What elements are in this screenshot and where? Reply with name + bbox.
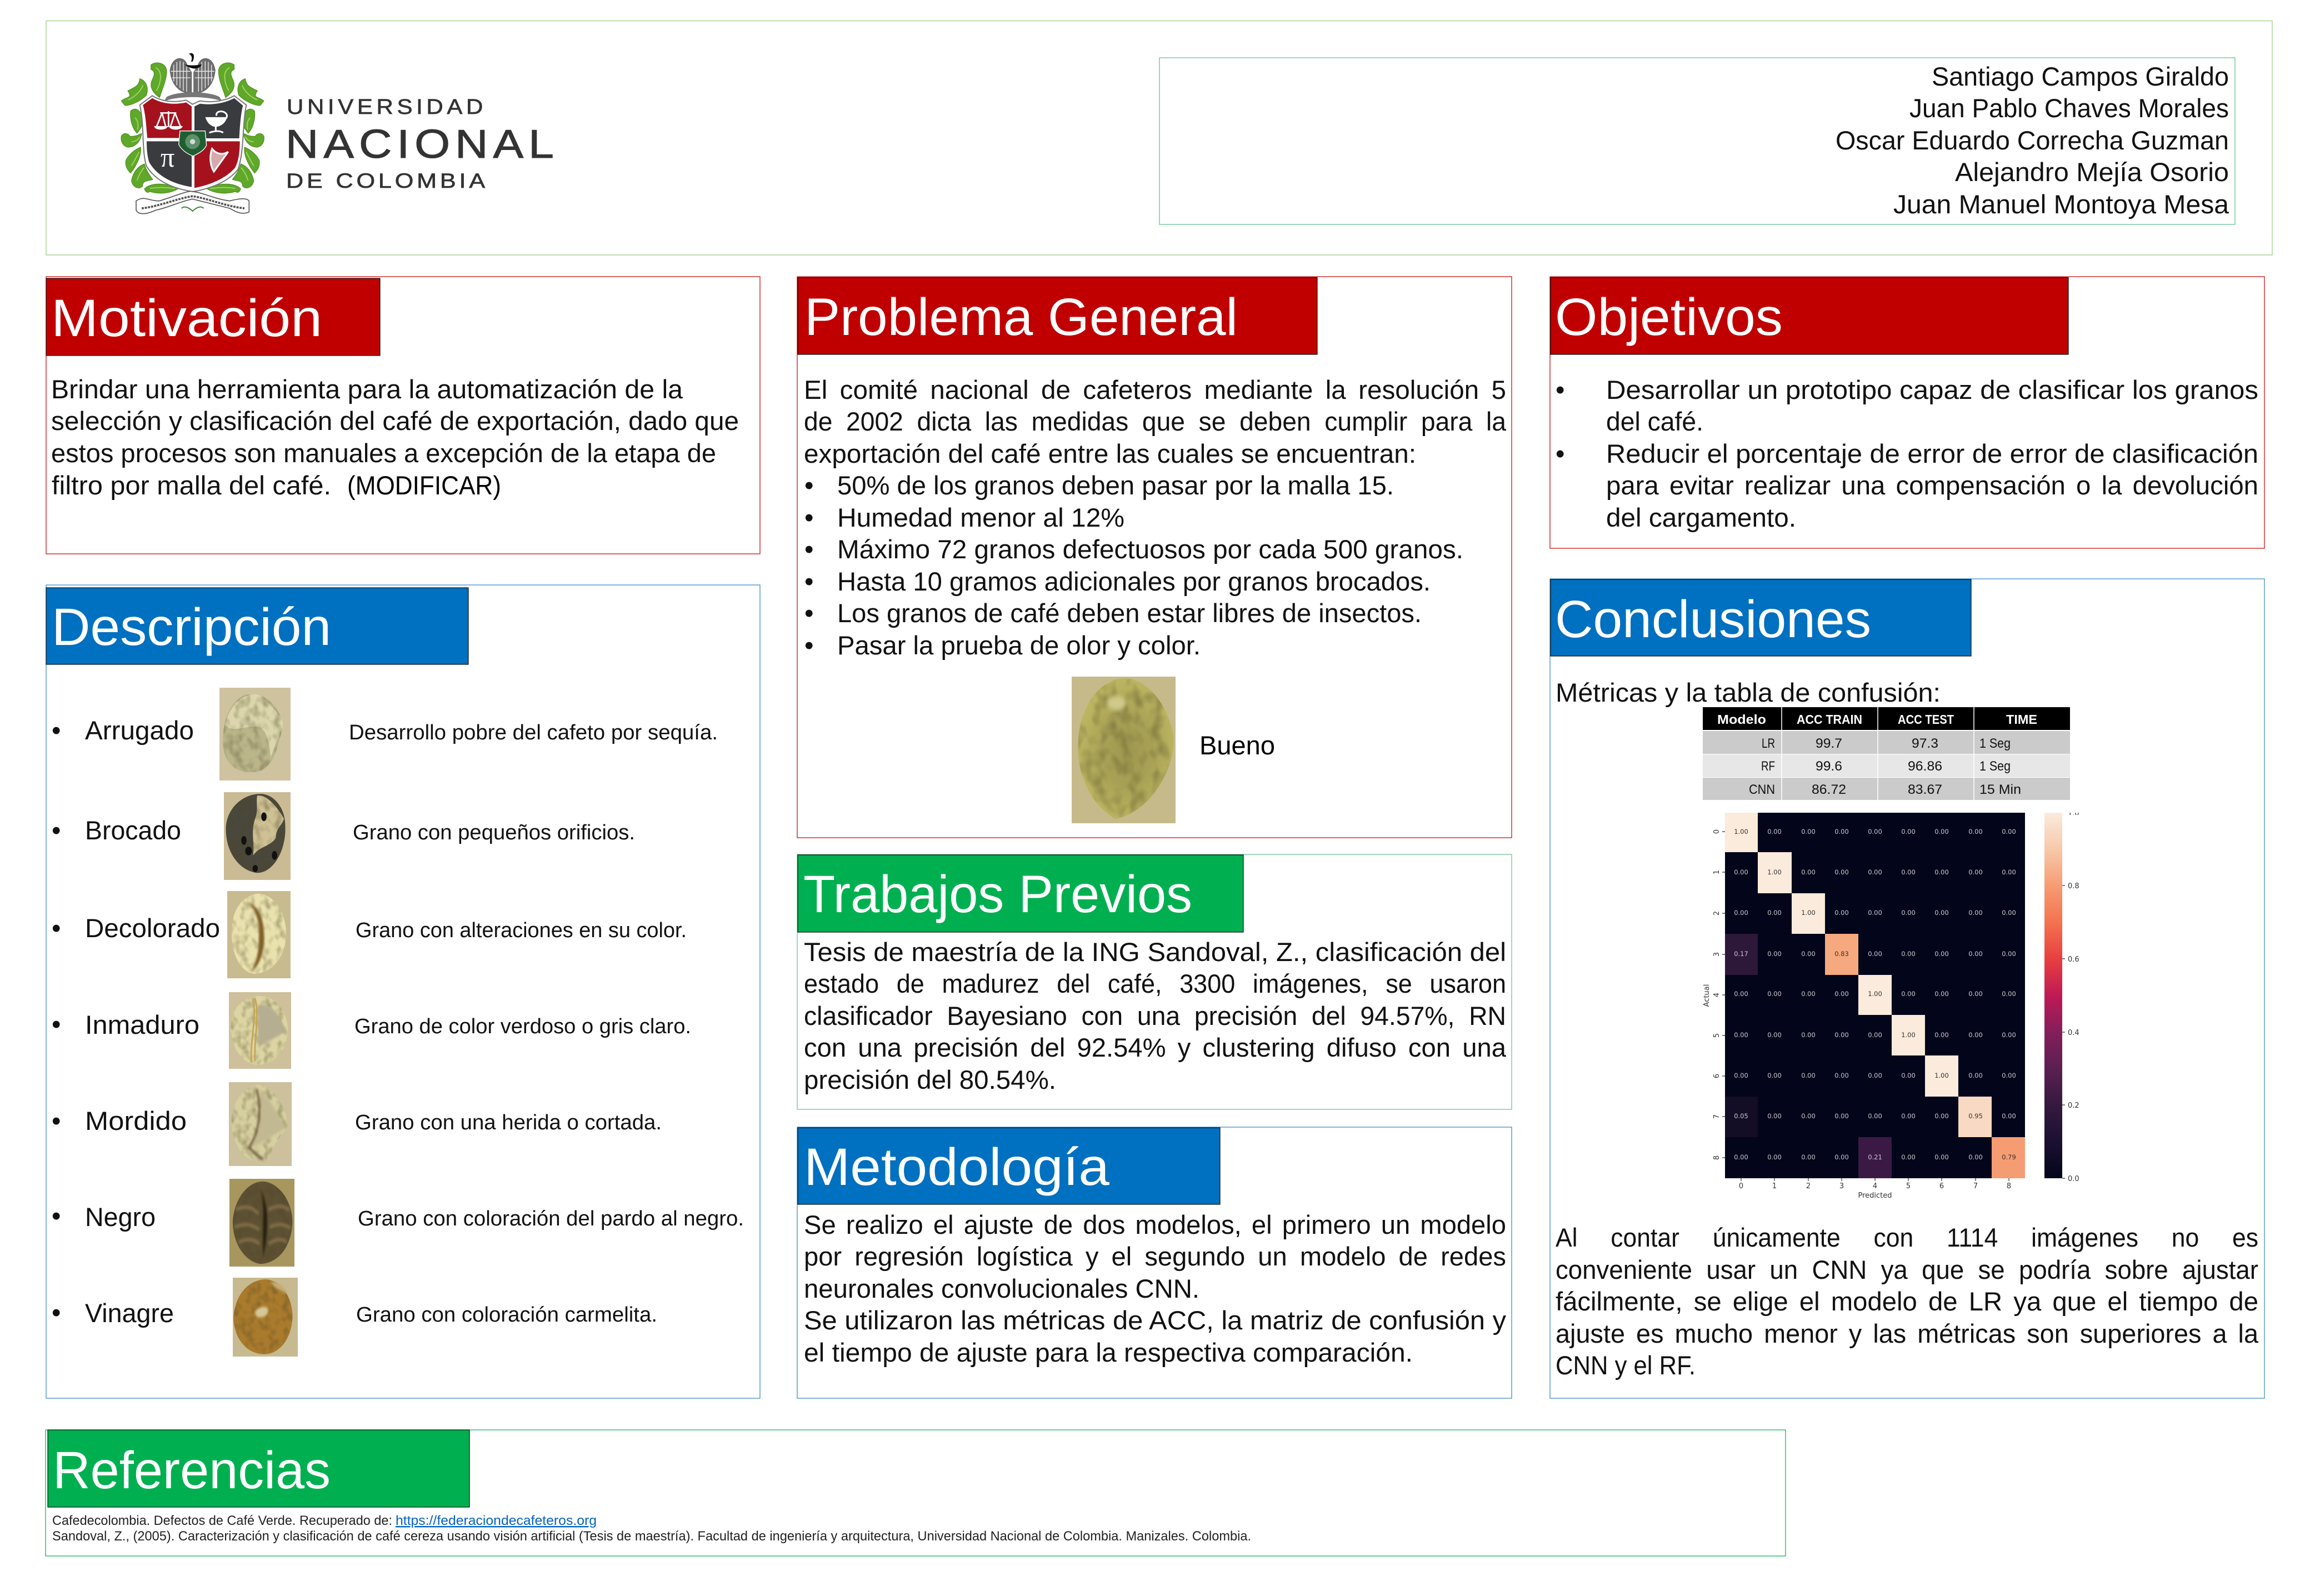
icon: scales — [155, 111, 182, 129]
item: Arrugado: • — [52, 716, 61, 745]
heatmap cells: 0.00 — [1968, 1031, 1983, 1039]
list: export requirements: 50% de los granos deben pasar por la malla 15. — [837, 471, 1394, 500]
heatmap cells: 0.00 — [2002, 1112, 2016, 1120]
heatmap cells: 0.00 — [1801, 950, 1816, 958]
text: conclusions body: fácilmente, se elige el modelo de LR ya que el tiempo de — [1556, 1287, 2258, 1316]
heatmap cells: 0.00 — [1934, 1112, 1949, 1120]
heatmap cells: 0.00 — [1934, 950, 1949, 958]
heatmap cells: 0.00 — [1834, 1112, 1849, 1120]
panel: Motivación — [46, 277, 760, 554]
heatmap cells: 0.00 — [2002, 1031, 2016, 1039]
colour bar: 0.0 — [2068, 1175, 2079, 1183]
heatmap cells: 0.00 — [1767, 1031, 1782, 1039]
heatmap cells: 0.00 — [1968, 1072, 1983, 1079]
list: export requirements — [804, 471, 1463, 660]
heatmap cells: 0.00 — [1934, 828, 1949, 835]
heatmap cells: 0.83 — [1834, 950, 1849, 958]
heatmap cells: 0.95 — [1968, 1112, 1983, 1120]
axis ticks and labels — [1703, 829, 2065, 1200]
heatmap cells: 1.00 — [1767, 868, 1782, 876]
axis ticks and labels: 7 — [1973, 1182, 1978, 1190]
text: references: https://federaciondecafeteros.org — [396, 1513, 597, 1528]
axis ticks and labels: 6 — [1939, 1182, 1944, 1190]
heatmap cells: 0.00 — [1801, 828, 1816, 835]
axis ticks and labels: 3 — [1713, 952, 1721, 957]
item: Brocado — [52, 792, 635, 880]
axis ticks and labels: 1 — [1713, 870, 1721, 874]
text: Trabajos Previos body: clasificador Bayesiano con una precisión del 94.57%, RN — [804, 1001, 1506, 1030]
item: Negro — [52, 1179, 744, 1267]
item: Brocado: Grano con pequeños orificios. — [353, 821, 635, 844]
heatmap cells: 0.00 — [1767, 1153, 1782, 1161]
heatmap cells: 0.00 — [1901, 950, 1916, 958]
axis ticks and labels: 5 — [1906, 1182, 1911, 1190]
axis ticks and labels: 4 — [1713, 993, 1721, 997]
image: bean Arrugado — [219, 688, 291, 781]
list: export requirements: • — [804, 534, 813, 564]
text: conclusions body: Al contar únicamente con 1114 imágenes no es — [1556, 1223, 2258, 1252]
heading: Referencias — [48, 1430, 469, 1507]
text: Metodología body: neuronales convolucionales CNN. — [804, 1274, 1199, 1303]
heatmap cells: 1.00 — [1901, 1031, 1916, 1039]
text: references: Sandoval, Z., (2005). Caracterización y clasificación de café cereza usando visión artificial (Tesis de maestría). Facultad de ingeniería y arquitectura, Universidad Nacional de Colombia. Manizales. Colombia. — [52, 1529, 1251, 1544]
item: Mordido — [52, 1082, 662, 1166]
text: Trabajos Previos body: Tesis de maestría de la ING Sandoval, Z., clasificación del — [804, 937, 1506, 967]
heatmap cells: 0.00 — [1801, 1072, 1816, 1079]
axis ticks and labels: 2 — [1806, 1182, 1811, 1190]
item: Inmaduro: Inmaduro — [85, 1010, 199, 1039]
text: references: Cafedecolombia. Defectos de Café Verde. Recuperado de: — [52, 1513, 392, 1528]
image: bean Negro — [229, 1179, 294, 1267]
scroll ribbon — [136, 191, 249, 214]
item: Negro: Negro — [85, 1202, 156, 1232]
table: model metrics: RF — [1761, 759, 1775, 774]
item: Arrugado: Arrugado — [85, 716, 194, 745]
text: Problema General body: exportación del café entre las cuales se encuentran: — [804, 439, 1416, 468]
image: bean Brocado — [224, 792, 291, 880]
heading: Metodología: Metodología — [804, 1138, 1109, 1197]
heatmap cells: 1.00 — [1734, 828, 1748, 835]
heatmap cells: 1.00 — [1801, 909, 1816, 917]
item: Vinagre: Grano con coloración carmelita. — [356, 1303, 657, 1327]
heading: Motivación: Motivación — [51, 289, 322, 348]
axis ticks and labels: 5 — [1713, 1033, 1721, 1038]
panel: Referencias — [46, 1430, 1786, 1556]
item: Inmaduro — [52, 992, 691, 1069]
table: model metrics: 1 Seg — [1979, 759, 2011, 774]
item: Vinagre: Vinagre — [85, 1298, 174, 1328]
heading: Problema General: Problema General — [804, 288, 1238, 347]
panel: Problema General — [797, 277, 1512, 838]
item: Mordido: Mordido — [85, 1106, 187, 1135]
heatmap cells: 0.00 — [1801, 990, 1816, 998]
heatmap cells: 0.00 — [1834, 1153, 1849, 1161]
table: model metrics: 1 Seg — [1979, 736, 2011, 751]
heatmap cells: 0.00 — [1901, 828, 1916, 835]
logo wordmark — [286, 96, 559, 192]
text: conclusions body — [1556, 1223, 2259, 1380]
heatmap cells: 0.00 — [1834, 868, 1849, 876]
heatmap cells: 0.00 — [1767, 1112, 1782, 1120]
heatmap cells: 0.00 — [1868, 1112, 1882, 1120]
heading: Problema General — [798, 278, 1317, 354]
item: Inmaduro: Grano de color verdoso o gris claro. — [354, 1015, 691, 1038]
item: Brocado: • — [52, 815, 61, 845]
list: objectives: • — [1556, 375, 1564, 404]
heatmap cells: 0.00 — [1734, 1153, 1748, 1161]
text: conclusions body: CNN y el RF. — [1556, 1350, 1696, 1380]
text: metrics intro: Métricas y la tabla de confusión: — [1556, 678, 1941, 707]
heatmap cells: 0.00 — [1734, 868, 1748, 876]
list: export requirements: Hasta 10 gramos adicionales por granos brocados. — [837, 567, 1431, 596]
axis ticks and labels: 8 — [1713, 1155, 1721, 1160]
list: export requirements: Los granos de café deben estar libres de insectos. — [837, 598, 1422, 628]
text: Motivación body: filtro por malla del café. — [52, 471, 331, 500]
heatmap cells: 0.05 — [1734, 1112, 1748, 1120]
item: Inmaduro: • — [52, 1009, 61, 1039]
heatmap cells: 0.17 — [1734, 950, 1748, 958]
text: Problema General body: El comité nacional de cafeteros mediante la resolución 5 — [804, 375, 1506, 404]
colour bar: 0.6 — [2068, 955, 2079, 964]
authors box: Santiago Campos Giraldo — [1932, 62, 2229, 91]
heading: Conclusiones — [1551, 579, 1971, 656]
panel: Metodología — [797, 1127, 1512, 1398]
icon: harp — [211, 149, 228, 172]
item: Decolorado: Grano con alteraciones en su color. — [356, 919, 687, 942]
item: Brocado: Brocado — [85, 815, 181, 845]
heatmap cells: 0.00 — [1934, 1153, 1949, 1161]
heatmap cells: 0.00 — [2002, 990, 2016, 998]
heatmap cells: 0.00 — [1934, 868, 1949, 876]
heatmap cells: 0.79 — [2002, 1153, 2016, 1161]
authors box: Juan Pablo Chaves Morales — [1909, 93, 2229, 123]
panel: Conclusiones — [1550, 579, 2264, 1398]
heatmap cells: 0.00 — [1868, 950, 1882, 958]
heatmap cells: 0.00 — [1934, 1031, 1949, 1039]
list: objectives: para evitar realizar una compensación o la devolución — [1606, 471, 2258, 500]
image: bean Decolorado — [227, 891, 291, 978]
heatmap cells: 0.00 — [1934, 990, 1949, 998]
axis ticks and labels: 1 — [1772, 1182, 1777, 1190]
text: Metodología body: el tiempo de ajuste para la respectiva comparación. — [804, 1338, 1413, 1367]
list: export requirements: • — [804, 471, 813, 500]
heatmap cells: 0.00 — [1901, 990, 1916, 998]
item: Mordido: Grano con una herida o cortada. — [355, 1111, 662, 1134]
authors box — [1159, 58, 2235, 224]
axis ticks and labels: 8 — [2007, 1182, 2011, 1190]
heatmap cells: 0.00 — [1868, 868, 1882, 876]
heatmap cells: 0.00 — [1801, 1153, 1816, 1161]
panel: header — [46, 21, 2272, 255]
authors box: Alejandro Mejía Osorio — [1955, 157, 2229, 187]
heatmap cells: 1.00 — [1934, 1072, 1949, 1079]
heatmap cells: 0.00 — [1901, 868, 1916, 876]
heatmap cells: 0.00 — [1801, 1112, 1816, 1120]
heading: Descripción — [46, 588, 468, 664]
text: Motivación body: estos procesos son manuales a excepción de la etapa de — [51, 438, 716, 468]
table: model metrics: ACC TRAIN — [1797, 712, 1862, 727]
list: export requirements: • — [804, 503, 813, 532]
icon: pi symbol: π — [161, 142, 174, 173]
item: Arrugado — [52, 688, 718, 781]
logo wordmark: UNIVERSIDAD — [287, 96, 487, 119]
heatmap cells: 0.00 — [2002, 950, 2016, 958]
logo wordmark: DE COLOMBIA — [286, 169, 488, 192]
panel: Trabajos Previos — [797, 854, 1512, 1109]
table: model metrics: TIME — [2006, 712, 2037, 727]
heading: Descripción: Descripción — [52, 598, 331, 657]
item: Decolorado: • — [52, 913, 61, 943]
item: Negro: Grano con coloración del pardo al negro. — [358, 1207, 744, 1230]
heatmap cells: 0.00 — [1901, 1112, 1916, 1120]
table: model metrics: 86.72 — [1812, 782, 1846, 797]
heatmap cells: 0.00 — [1734, 1031, 1748, 1039]
item: Mordido: • — [52, 1106, 61, 1135]
heading: Motivación — [46, 278, 380, 356]
icon: bowl of hygieia — [207, 111, 227, 133]
colour bar: 0.8 — [2068, 882, 2079, 890]
table: model metrics: 97.3 — [1912, 736, 1938, 751]
text: Trabajos Previos body: precisión del 80.54%. — [804, 1065, 1056, 1094]
list: export requirements: • — [804, 631, 813, 660]
axis ticks and labels: 3 — [1839, 1182, 1844, 1190]
heatmap cells: 0.00 — [1968, 909, 1983, 917]
heatmap cells: 0.00 — [1734, 1072, 1748, 1079]
axis ticks and labels: 2 — [1713, 911, 1721, 915]
text: Metodología body: Se utilizaron las métricas de ACC, la matriz de confusión y — [804, 1305, 1507, 1335]
heading: Trabajos Previos — [798, 855, 1243, 932]
heatmap cells: 0.00 — [2002, 868, 2016, 876]
heatmap cells: 0.00 — [1834, 1072, 1849, 1079]
table: model metrics: LR — [1762, 736, 1775, 751]
axis ticks and labels: 7 — [1713, 1114, 1721, 1119]
icon: university coat of arms — [121, 53, 264, 214]
table: model metrics: Modelo — [1717, 712, 1766, 727]
colour bar: 0.2 — [2068, 1102, 2079, 1110]
heatmap cells: 0.00 — [1801, 1031, 1816, 1039]
text: Problema General body — [804, 375, 1507, 468]
panel: Objetivos — [1550, 277, 2264, 548]
heading: Conclusiones: Conclusiones — [1555, 590, 1871, 649]
heatmap cells: 0.00 — [1868, 909, 1882, 917]
text: Problema General body: de 2002 dicta las medidas que se deben cumplir para la — [804, 407, 1507, 436]
colour bar: 0.4 — [2068, 1029, 2079, 1037]
image: bean Mordido — [229, 1082, 292, 1166]
axis ticks and labels: 0 — [1713, 829, 1721, 834]
text: Trabajos Previos body — [804, 937, 1507, 1094]
heatmap cells: 0.00 — [2002, 828, 2016, 835]
list: export requirements: Pasar la prueba de olor y color. — [837, 631, 1201, 660]
heatmap cells: 0.00 — [1767, 990, 1782, 998]
text: Trabajos Previos body: estado de madurez del café, 3300 imágenes, se usaron — [804, 969, 1506, 998]
text: Metodología body: Se realizo el ajuste de dos modelos, el primero un modelo — [804, 1210, 1506, 1239]
list: objectives — [1556, 375, 2258, 532]
heading: Metodología — [798, 1128, 1220, 1204]
heatmap cells: 0.00 — [1734, 990, 1748, 998]
heatmap cells: 0.00 — [1968, 828, 1983, 835]
image: bean Vinagre — [233, 1278, 298, 1357]
item: Decolorado — [52, 891, 687, 978]
image: good bean — [1072, 677, 1176, 823]
table: model metrics: 96.86 — [1908, 759, 1942, 774]
heading: Trabajos Previos: Trabajos Previos — [803, 865, 1192, 924]
heading: Objetivos: Objetivos — [1555, 288, 1783, 347]
list: export requirements: • — [804, 567, 813, 596]
text: Motivación body — [51, 374, 739, 500]
axis ticks and labels: Actual — [1703, 984, 1711, 1007]
heatmap cells: 0.00 — [2002, 909, 2016, 917]
authors box: Oscar Eduardo Correcha Guzman — [1836, 126, 2229, 155]
item: Negro: • — [52, 1201, 61, 1230]
text: Trabajos Previos body: con una precisión del 92.54% y clustering difuso con una — [804, 1033, 1507, 1062]
logo wordmark: NACIONAL — [286, 122, 559, 167]
heatmap cells: 0.00 — [2002, 1072, 2016, 1079]
table: model metrics: CNN — [1749, 782, 1775, 797]
list: objectives: Reducir el porcentaje de error de error de clasificación — [1606, 439, 2258, 468]
heatmap cells: 0.00 — [1868, 828, 1882, 835]
item: Arrugado: Desarrollo pobre del cafeto por sequía. — [349, 721, 718, 744]
heatmap cells: 0.00 — [1968, 990, 1983, 998]
table: model metrics: 99.7 — [1816, 736, 1842, 751]
axis ticks and labels: 4 — [1873, 1182, 1877, 1190]
text: Metodología body: por regresión logística y el segundo un modelo de redes — [804, 1242, 1506, 1271]
list: objectives: del café. — [1606, 407, 1703, 436]
list: export requirements: • — [804, 598, 813, 628]
heading: Objetivos — [1551, 278, 2068, 354]
heatmap cells: 0.00 — [1834, 909, 1849, 917]
text: conclusions body: ajuste es mucho menor y las métricas son superiores a la — [1556, 1319, 2259, 1348]
heatmap cells: 0.00 — [1834, 828, 1849, 835]
heading: Referencias: Referencias — [53, 1441, 331, 1500]
table: model metrics: 99.6 — [1816, 759, 1842, 774]
authors box: Juan Manuel Montoya Mesa — [1893, 189, 2229, 219]
list: objectives: del cargamento. — [1606, 503, 1796, 532]
heatmap cells — [1725, 813, 2025, 1178]
image: bean Inmaduro — [229, 992, 291, 1069]
list: export requirements: Máximo 72 granos defectuosos por cada 500 granos. — [837, 534, 1463, 564]
text: Motivación body: Brindar una herramienta para la automatización de la — [51, 374, 683, 404]
text: Metodología body — [804, 1210, 1507, 1367]
heatmap cells: 0.00 — [1767, 828, 1782, 835]
item: Decolorado: Decolorado — [85, 913, 220, 943]
item: Vinagre: • — [52, 1298, 61, 1327]
heatmap cells: 0.00 — [1968, 868, 1983, 876]
heatmap cells: 0.00 — [1734, 909, 1748, 917]
table: model metrics: ACC TEST — [1898, 712, 1954, 727]
logo: Universidad Nacional de Colombia — [121, 53, 559, 214]
heatmap cells: 0.00 — [1934, 909, 1949, 917]
heatmap cells: 0.00 — [1801, 868, 1816, 876]
heatmap cells: 0.00 — [1901, 1072, 1916, 1079]
chart: confusion matrix heatmap — [1703, 809, 2079, 1200]
colour bar — [2044, 809, 2079, 1183]
heatmap cells: 0.00 — [1834, 990, 1849, 998]
text: Motivación body: selección y clasificación del café de exportación, dado que — [51, 406, 739, 436]
panel: Descripción — [46, 585, 760, 1398]
table: model metrics — [1703, 707, 2070, 800]
heatmap cells: 0.00 — [1767, 909, 1782, 917]
text: references — [52, 1513, 1251, 1544]
text: Motivación body: (MODIFICAR) — [347, 471, 501, 500]
heatmap cells: 0.00 — [1767, 950, 1782, 958]
item: Vinagre — [52, 1278, 657, 1357]
heatmap cells: 0.00 — [1901, 909, 1916, 917]
axis ticks and labels: 6 — [1713, 1074, 1721, 1078]
heatmap cells: 0.00 — [1901, 1153, 1916, 1161]
table: model metrics: 83.67 — [1908, 782, 1942, 797]
list: objectives: Desarrollar un prototipo capaz de clasificar los granos — [1606, 375, 2258, 404]
colour bar: 1.0 — [2068, 809, 2079, 818]
heatmap cells: 0.00 — [1868, 1072, 1882, 1079]
heatmap cells: 0.00 — [1868, 1031, 1882, 1039]
heatmap cells: 0.00 — [1968, 950, 1983, 958]
table: model metrics: 15 Min — [1979, 782, 2021, 797]
label: Bueno: Bueno — [1199, 731, 1275, 760]
heatmap cells: 0.00 — [1767, 1072, 1782, 1079]
heatmap cells: 1.00 — [1868, 990, 1882, 998]
list: export requirements: Humedad menor al 12% — [837, 503, 1124, 532]
axis ticks and labels: Predicted — [1858, 1192, 1892, 1200]
heatmap cells: 0.00 — [1968, 1153, 1983, 1161]
text: conclusions body: conveniente usar un CNN ya que se podría sobre ajustar — [1556, 1255, 2258, 1284]
heatmap cells: 0.00 — [1834, 1031, 1849, 1039]
list: objectives: • — [1556, 439, 1564, 468]
axis ticks and labels: 0 — [1739, 1182, 1743, 1190]
heatmap cells: 0.21 — [1868, 1153, 1882, 1161]
